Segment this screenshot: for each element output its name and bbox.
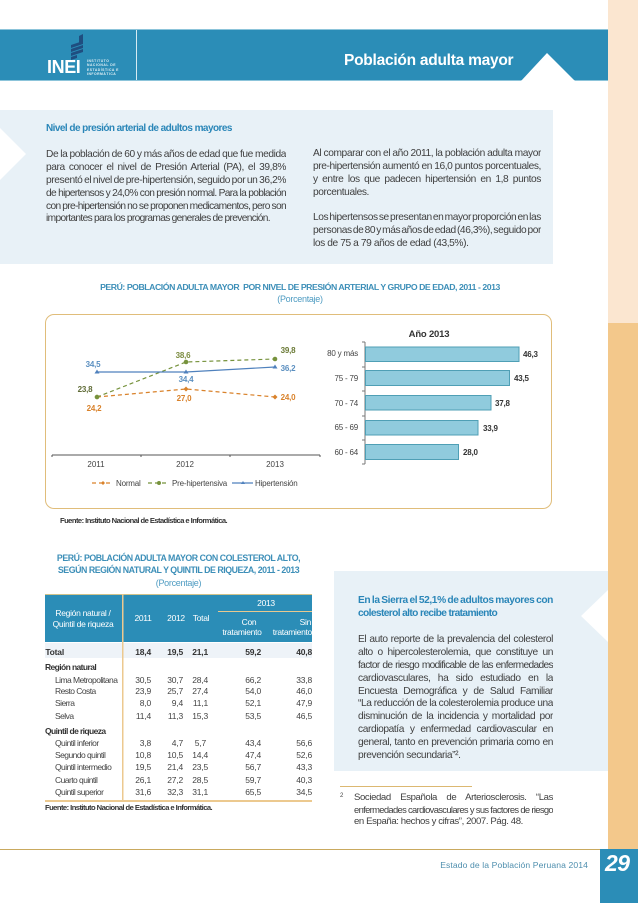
logo institute name: ESTADÍSTICA E bbox=[87, 68, 119, 72]
total row: 21,1 bbox=[192, 647, 208, 657]
table header: tratamiento bbox=[273, 627, 313, 637]
series: normal bbox=[94, 386, 278, 400]
cholesterol text block: disminución de la incidencia y mortalidad por bbox=[358, 711, 553, 722]
region group: 11,4 bbox=[136, 711, 151, 721]
header band bbox=[0, 29, 608, 81]
category labels: 80 y más bbox=[327, 349, 358, 358]
cholesterol text block: cardiovasculares, ha sido estudiado en la bbox=[358, 673, 553, 684]
right side strip orange bbox=[608, 323, 638, 849]
chart subtitle: (Porcentaje) bbox=[277, 294, 323, 304]
region group: 9,4 bbox=[172, 698, 183, 708]
value labels: 28,0 bbox=[463, 448, 479, 457]
data labels: 34,5 bbox=[86, 360, 101, 369]
left text block: importantes para los programas generales de prevención. bbox=[46, 213, 270, 224]
wealth quintile group: 52,6 bbox=[296, 750, 312, 760]
wealth quintile group: 3,8 bbox=[140, 738, 151, 748]
total row: 59,2 bbox=[245, 647, 261, 657]
panel heading: Nivel de presión arterial de adultos mayores bbox=[46, 123, 232, 134]
wealth quintile group: Quintil intermedio bbox=[55, 762, 112, 772]
wealth quintile group: 28,5 bbox=[192, 775, 208, 785]
wealth quintile group: 14,4 bbox=[192, 750, 208, 760]
region group: 27,4 bbox=[192, 686, 208, 696]
axis labels bbox=[87, 460, 284, 469]
wealth quintile group: 56,7 bbox=[245, 762, 261, 772]
wealth quintile group: Segundo quintil bbox=[55, 750, 106, 760]
logo mark bbox=[71, 34, 83, 60]
legend: Normal bbox=[116, 479, 141, 488]
wealth quintile group: 40,3 bbox=[296, 775, 312, 785]
footer text: Estado de la Población Peruana 2014 bbox=[440, 860, 588, 870]
table header: Sin bbox=[300, 617, 312, 627]
vertical rule bbox=[122, 594, 124, 801]
wealth quintile group: 43,4 bbox=[245, 738, 261, 748]
wealth quintile group: 47,4 bbox=[245, 750, 261, 760]
wealth quintile group: 31,1 bbox=[192, 787, 208, 797]
legend: Hipertensión bbox=[255, 479, 298, 488]
cholesterol heading bbox=[358, 595, 553, 619]
region group: 11,1 bbox=[193, 698, 208, 708]
region group bbox=[45, 662, 312, 721]
category labels: 60 - 64 bbox=[334, 448, 359, 457]
table header: Con bbox=[242, 617, 257, 627]
value labels bbox=[463, 350, 539, 457]
cholesterol text block: factor de riesgo modificable de las enfermedades bbox=[358, 660, 553, 671]
wealth quintile group bbox=[45, 726, 312, 797]
data labels: 38,6 bbox=[176, 351, 191, 360]
data labels: 24,2 bbox=[87, 404, 102, 413]
left text block bbox=[46, 149, 286, 224]
right text block bbox=[313, 148, 541, 249]
data labels: 39,8 bbox=[281, 346, 296, 355]
cholesterol text block: prevención secundaria”². bbox=[358, 750, 461, 761]
table header: Quintil de riqueza bbox=[53, 619, 114, 629]
data labels: 34,4 bbox=[179, 375, 194, 384]
total row: Total bbox=[45, 647, 64, 657]
value labels: 46,3 bbox=[523, 350, 539, 359]
region group: 23,9 bbox=[135, 686, 151, 696]
legend: Pre-hipertensiva bbox=[172, 479, 228, 488]
panel: cholesterol bbox=[334, 571, 608, 771]
wealth quintile group: Cuarto quintil bbox=[55, 775, 98, 785]
table header: 2011 bbox=[134, 613, 152, 623]
total row: 18,4 bbox=[135, 647, 151, 657]
data labels: 27,0 bbox=[177, 394, 192, 403]
total row bbox=[45, 643, 312, 658]
logo institute name: INSTITUTO bbox=[87, 59, 109, 63]
region group: 25,7 bbox=[167, 686, 183, 696]
chart source: Fuente: Instituto Nacional de Estadística e Informática. bbox=[60, 516, 227, 525]
wealth quintile group: 26,1 bbox=[135, 775, 151, 785]
region group: 15,3 bbox=[192, 711, 208, 721]
left text block: con pre-hipertensión no se proponen medicamentos, pero son bbox=[46, 201, 286, 212]
data labels: 23,8 bbox=[78, 385, 93, 394]
region group: 33,8 bbox=[296, 675, 312, 685]
cholesterol text block bbox=[358, 634, 553, 761]
wealth quintile group: 56,6 bbox=[296, 738, 312, 748]
page number: 29 bbox=[605, 850, 630, 876]
panel: blood pressure intro bbox=[0, 110, 553, 264]
left text block: para conocer el nivel de Presión Arterial (PA), el 39,8% bbox=[46, 162, 286, 173]
table header bbox=[45, 594, 313, 642]
legend bbox=[92, 479, 298, 488]
wealth quintile group: 43,3 bbox=[296, 762, 312, 772]
wealth quintile group: 21,4 bbox=[167, 762, 183, 772]
axis labels: 2012 bbox=[176, 460, 194, 469]
wealth quintile group: Quintil de riqueza bbox=[45, 726, 106, 736]
wealth quintile group: 27,2 bbox=[167, 775, 183, 785]
region group: 66,2 bbox=[245, 675, 261, 685]
right side strip light bbox=[608, 0, 638, 323]
data labels: 36,2 bbox=[281, 364, 296, 373]
page number box bbox=[600, 849, 638, 903]
region group: 46,5 bbox=[296, 711, 312, 721]
wealth quintile group: 4,7 bbox=[172, 738, 183, 748]
table header: tratamiento bbox=[222, 627, 262, 637]
data labels bbox=[78, 346, 296, 413]
right text block: porcentuales. bbox=[313, 187, 369, 198]
footnote: enfermedades cardiovasculares y sus factores de riesgo bbox=[354, 804, 553, 815]
left text block: De la población de 60 y más años de edad que fue medida bbox=[46, 149, 286, 160]
region group: 30,7 bbox=[167, 675, 183, 685]
left text block: presentó el nivel de pre-hipertensión, seguido por un 36,2% bbox=[46, 175, 286, 186]
panel chevron bbox=[0, 128, 26, 180]
wealth quintile group: 65,5 bbox=[245, 787, 261, 797]
wealth quintile group: 59,7 bbox=[245, 775, 261, 785]
category labels: 75 - 79 bbox=[334, 374, 359, 383]
logo institute name bbox=[87, 59, 119, 76]
chart title: PERÚ: POBLACIÓN ADULTA MAYOR POR NIVEL DE PRESIÓN ARTERIAL Y GRUPO DE EDAD, 2011 - 2013 bbox=[100, 282, 500, 292]
region group: Selva bbox=[55, 711, 74, 721]
total row: 40,8 bbox=[296, 647, 312, 657]
right text block: Los hipertensos se presentan en mayor proporción en las bbox=[313, 212, 541, 223]
cholesterol text block: cardiopatía y enfermedad cardiovascular en bbox=[358, 724, 553, 735]
cholesterol text block: general, tanto en prevención primaria como en bbox=[358, 737, 553, 748]
table header: Total bbox=[193, 613, 210, 623]
panel chevron bbox=[581, 590, 608, 642]
value labels: 33,9 bbox=[483, 424, 499, 433]
table header: 2013 bbox=[257, 598, 275, 608]
region group: 54,0 bbox=[245, 686, 261, 696]
footnote rule bbox=[340, 786, 472, 787]
wealth quintile group: 32,3 bbox=[167, 787, 183, 797]
wealth quintile group: 10,5 bbox=[167, 750, 183, 760]
wealth quintile group: 5,7 bbox=[195, 738, 206, 748]
table subtitle: (Porcentaje) bbox=[156, 578, 201, 588]
value labels: 37,8 bbox=[495, 399, 511, 408]
right text block: personas de 80 y más años de edad (46,3%), seguido por bbox=[313, 225, 541, 236]
table source: Fuente: Instituto Nacional de Estadística e Informática. bbox=[45, 803, 212, 812]
logo wordmark: INEI bbox=[47, 57, 80, 77]
region group: 28,4 bbox=[192, 675, 208, 685]
region group: Resto Costa bbox=[55, 686, 97, 696]
table header: 2012 bbox=[167, 613, 185, 623]
region group: Región natural bbox=[45, 662, 96, 672]
region group: 11,3 bbox=[168, 711, 183, 721]
table title: PERÚ: POBLACIÓN ADULTA MAYOR CON COLESTEROL ALTO, bbox=[57, 553, 300, 563]
category labels: 70 - 74 bbox=[334, 399, 359, 408]
cholesterol heading: colesterol alto recibe tratamiento bbox=[358, 608, 497, 619]
series: hypertension bbox=[94, 364, 278, 374]
category labels: 65 - 69 bbox=[334, 423, 359, 432]
right text block: los de 75 a 79 años de edad (43,5%). bbox=[313, 238, 469, 249]
wealth quintile group: Quintil superior bbox=[55, 787, 104, 797]
cholesterol text block: El auto reporte de la prevalencia del colesterol bbox=[358, 634, 553, 645]
bars bbox=[366, 347, 519, 460]
logo institute name: NACIONAL DE bbox=[87, 63, 116, 67]
right text block: y entre los que padecen hipertensión en 1,8 puntos bbox=[313, 174, 541, 185]
cholesterol heading: En la Sierra el 52,1% de adultos mayores con bbox=[358, 595, 553, 606]
axis labels: 2011 bbox=[87, 460, 105, 469]
category labels bbox=[327, 349, 359, 457]
logo institute name: INFORMÁTICA bbox=[87, 72, 116, 76]
wealth quintile group: 19,5 bbox=[135, 762, 151, 772]
wealth quintile group: 23,5 bbox=[192, 762, 208, 772]
region group: 30,5 bbox=[135, 675, 151, 685]
region group: Lima Metropolitana bbox=[55, 675, 118, 685]
region group: 8,0 bbox=[140, 698, 151, 708]
table title bbox=[57, 552, 300, 575]
footer rule bbox=[0, 849, 600, 850]
left text block: de hipertensos y 24,0% con presión normal. Para la población bbox=[46, 188, 286, 199]
series: pre-hypertensive bbox=[95, 357, 277, 399]
header divider bbox=[136, 30, 137, 80]
footnote: 2 bbox=[340, 793, 343, 799]
region group: 47,9 bbox=[296, 698, 312, 708]
region group: 46,0 bbox=[296, 686, 312, 696]
region group: Sierra bbox=[55, 698, 75, 708]
data labels: 24,0 bbox=[281, 393, 296, 402]
region group: 52,1 bbox=[245, 698, 261, 708]
footnote bbox=[340, 792, 553, 827]
INEI logo bbox=[47, 34, 119, 77]
table title: SEGÚN REGIÓN NATURAL Y QUINTIL DE RIQUEZA, 2011 - 2013 bbox=[58, 564, 299, 574]
footnote: Sociedad Española de Arteriosclerosis. “Las bbox=[354, 792, 553, 803]
chart frame bbox=[45, 314, 552, 509]
footnote: en España: hechos y cifras”, 2007. Pág. 48. bbox=[354, 816, 523, 827]
wealth quintile group: 34,5 bbox=[296, 787, 312, 797]
region group: 53,5 bbox=[245, 711, 261, 721]
bar chart title: Año 2013 bbox=[409, 329, 449, 340]
cholesterol text block: “La reducción de la colesterolemia produce una bbox=[358, 698, 553, 709]
value labels: 43,5 bbox=[514, 374, 530, 383]
total row: 19,5 bbox=[167, 647, 183, 657]
table header: Región natural / bbox=[55, 608, 112, 618]
bottom rule bbox=[45, 800, 312, 802]
wealth quintile group: Quintil inferior bbox=[55, 738, 99, 748]
right text block: pre-hipertensión aumentó en 16,0 puntos porcentuales, bbox=[313, 161, 541, 172]
wealth quintile group: 10,8 bbox=[135, 750, 151, 760]
axis labels: 2013 bbox=[266, 460, 284, 469]
cholesterol text block: alto o hipercolesterolemia, que constituye un bbox=[358, 647, 553, 658]
header title: Población adulta mayor bbox=[344, 52, 513, 69]
wealth quintile group: 31,6 bbox=[135, 787, 151, 797]
